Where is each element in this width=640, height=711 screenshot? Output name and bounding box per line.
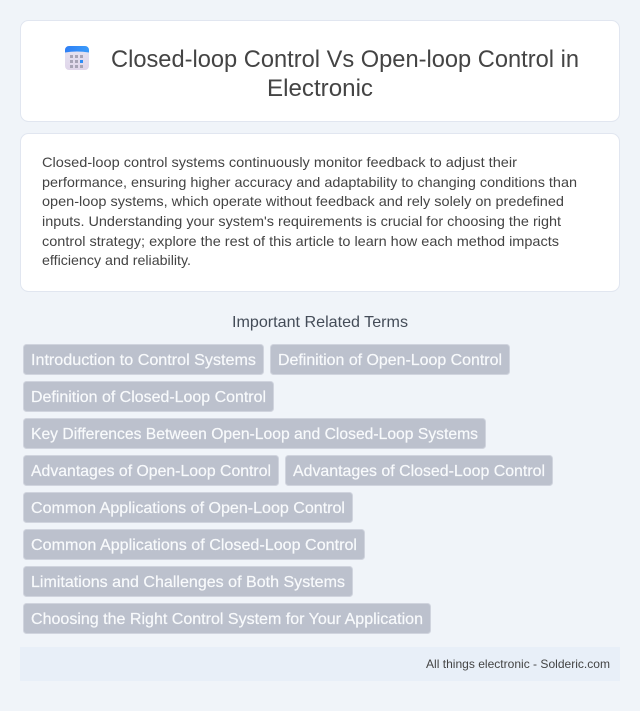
tag: open-loop advantages	[24, 456, 278, 486]
panel: header	[20, 20, 620, 122]
tag: limitations: Limitations and Challenges of Both Systems	[31, 574, 345, 591]
tag: open-loop applications	[24, 492, 352, 522]
tag: open-loop definition: Definition of Open-Loop Control	[278, 352, 502, 369]
footer	[20, 647, 620, 681]
panel: description: control strategy; explore the rest of this article to learn how each method impacts	[42, 233, 559, 249]
panel: description: open-loop systems, which operate without feedback and rely solely on predefined	[42, 193, 564, 209]
tag: introduction	[24, 344, 264, 374]
panel: description: Closed-loop control systems continuously monitor feedback to adjust their	[42, 154, 517, 170]
tag: introduction: Introduction to Control Systems	[31, 352, 256, 369]
tag: closed-loop advantages: Advantages of Closed-Loop Control	[293, 463, 545, 480]
tag: limitations	[24, 566, 352, 596]
tag: key differences: Key Differences Between Open-Loop and Closed-Loop Systems	[31, 426, 478, 443]
title	[111, 46, 579, 102]
tag: closed-loop advantages	[286, 456, 552, 486]
title: Electronic	[267, 75, 373, 102]
tag: closed-loop applications	[24, 530, 364, 560]
tag: key differences	[24, 418, 486, 448]
tag: open-loop definition	[270, 344, 510, 374]
heading: related terms: Important Related Terms	[232, 314, 408, 331]
tag: choosing	[24, 604, 430, 634]
icon: calendar grid	[65, 46, 89, 70]
tag: choosing: Choosing the Right Control System for Your Application	[31, 611, 423, 628]
tag: closed-loop definition	[24, 382, 274, 412]
tag: open-loop advantages: Advantages of Open-Loop Control	[31, 463, 271, 480]
panel: description: inputs. Understanding your system's requirements is crucial for choosing the right	[42, 213, 561, 229]
panel: description	[20, 134, 620, 292]
tag: open-loop applications: Common Applications of Open-Loop Control	[31, 500, 345, 517]
panel: description: performance, ensuring higher accuracy and adaptability to changing conditions than	[42, 174, 577, 190]
footer: All things electronic - Solderic.com	[426, 657, 610, 671]
tag: closed-loop applications: Common Applications of Closed-Loop Control	[31, 537, 357, 554]
tag: closed-loop definition: Definition of Closed-Loop Control	[31, 389, 266, 406]
panel: description: efficiency and reliability.	[42, 252, 191, 268]
title: Closed-loop Control Vs Open-loop Control in	[111, 46, 579, 73]
